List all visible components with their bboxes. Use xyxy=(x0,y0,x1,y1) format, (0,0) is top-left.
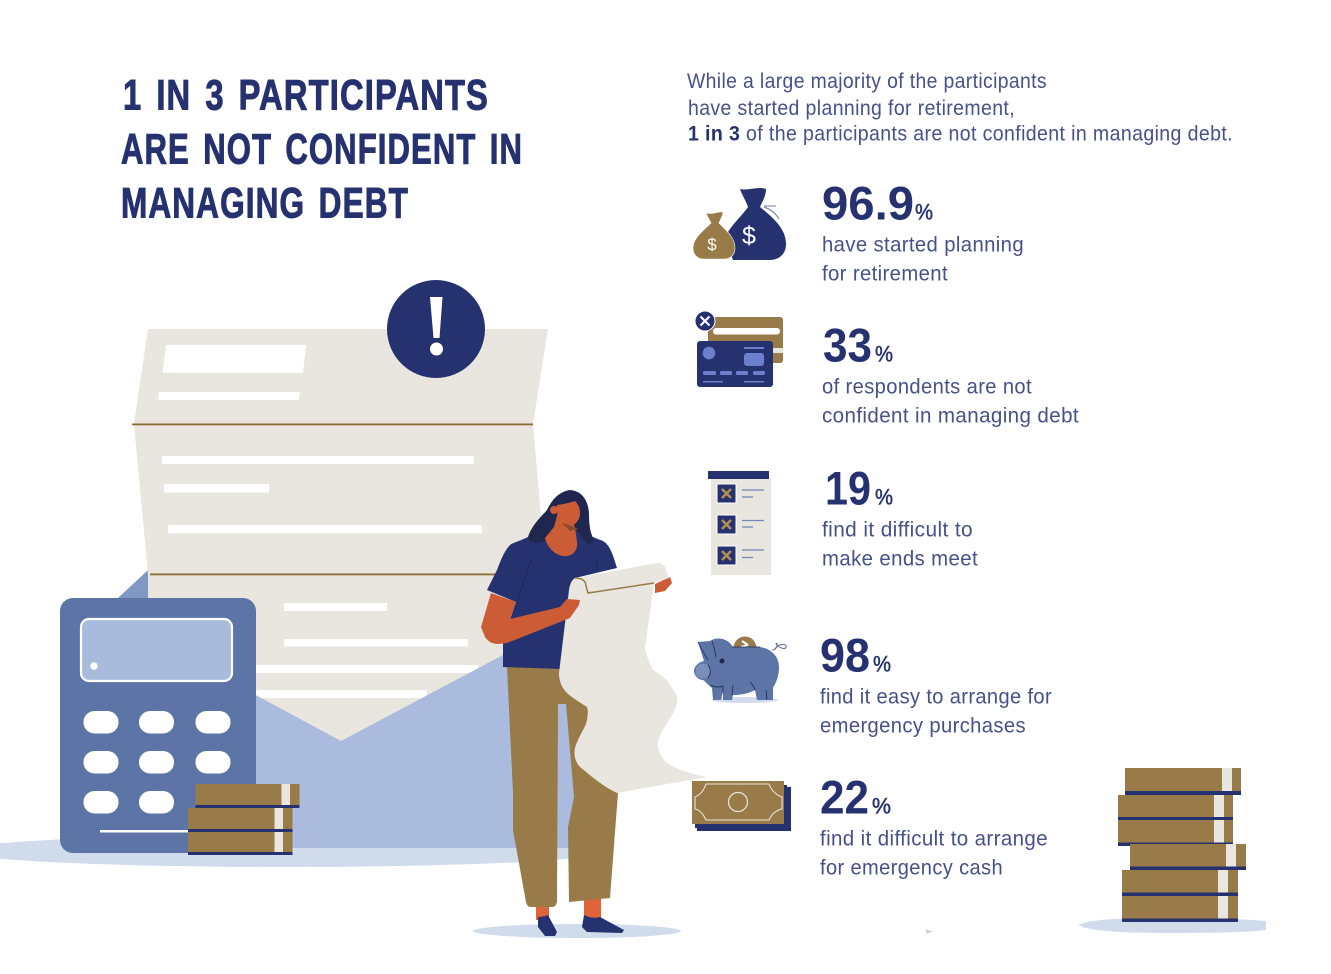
icon: credit cards xyxy=(695,311,783,387)
illustration: woman reading a long bill xyxy=(473,490,707,938)
unit: % xyxy=(875,484,893,510)
unit: % xyxy=(915,200,933,224)
illustration: envelope and letter xyxy=(0,329,610,867)
description: make ends meet xyxy=(822,546,978,570)
description: find it difficult to xyxy=(822,518,973,542)
title: 1 IN 3 PARTICIPANTS xyxy=(123,72,489,120)
illustration: calculator xyxy=(60,598,256,853)
illustration: small book stack xyxy=(188,784,300,855)
intro text: While a large majority of the participants xyxy=(687,70,1047,93)
stat row: 98% xyxy=(694,630,1052,738)
description: for emergency cash xyxy=(820,856,1003,880)
title: MANAGING DEBT xyxy=(121,180,409,228)
intro text xyxy=(687,70,1233,146)
unit: % xyxy=(872,794,891,818)
stat row: 19% xyxy=(708,462,978,575)
description: of respondents are not xyxy=(822,374,1032,398)
figure: 96.9 xyxy=(822,178,914,230)
icon: money bags xyxy=(693,188,786,260)
description: find it difficult to arrange xyxy=(820,826,1048,850)
description xyxy=(822,374,1079,428)
description: have started planning xyxy=(822,232,1024,256)
icon: checklist xyxy=(708,471,771,575)
icon: money bags: $ xyxy=(707,235,717,254)
description: confident in managing debt xyxy=(822,404,1079,428)
figure: 98 xyxy=(820,630,870,682)
figure: 22 xyxy=(820,772,869,824)
intro text: have started planning for retirement, xyxy=(688,97,1015,120)
description xyxy=(822,232,1024,286)
stat row: 22% xyxy=(692,772,1048,880)
illustration: large book stack xyxy=(1078,768,1266,933)
icon: alert badge xyxy=(387,280,485,378)
unit: % xyxy=(873,652,891,676)
intro text: 1 in 3 of the participants are not confident in managing debt. xyxy=(688,122,1233,146)
icon: money bags: $ xyxy=(742,222,756,250)
figure: 19 xyxy=(825,462,871,516)
stat row: 96.9% xyxy=(693,178,1024,286)
unit: % xyxy=(875,342,893,366)
description: emergency purchases xyxy=(820,714,1026,738)
description xyxy=(822,518,978,570)
description xyxy=(820,684,1052,738)
figure: 33 xyxy=(823,320,872,372)
description xyxy=(820,826,1048,880)
icon: banknotes xyxy=(692,781,791,831)
title: ARE NOT CONFIDENT IN xyxy=(121,126,523,174)
stat row: 33% xyxy=(695,311,1079,428)
description: find it easy to arrange for xyxy=(820,684,1052,708)
title xyxy=(121,72,523,228)
description: for retirement xyxy=(822,262,948,286)
icon: piggy bank xyxy=(694,636,786,703)
